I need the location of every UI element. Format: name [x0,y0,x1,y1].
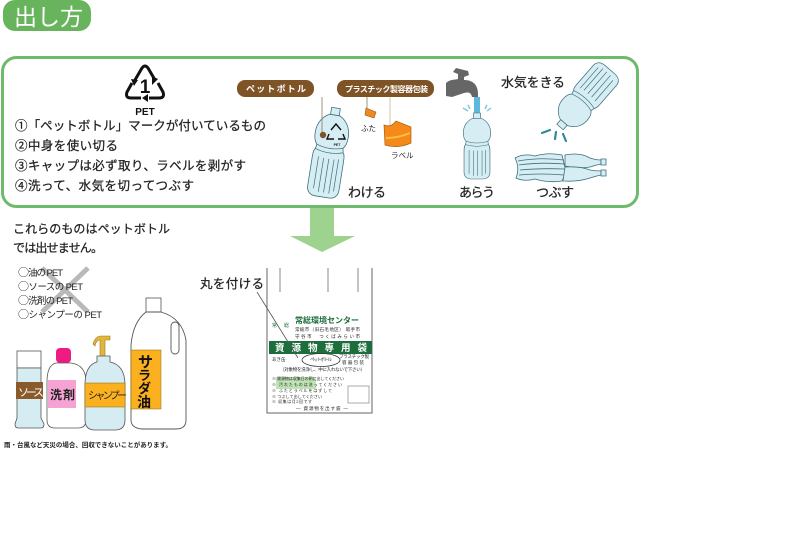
cross mark [42,268,88,312]
bag name box [348,386,369,403]
illustration: separating bottle, cap and label: PET [334,143,341,147]
icon: PET recycling mark: 1 [140,77,151,98]
callout: mark with a circle [200,277,298,358]
bag heading: 常総環境センター [295,315,359,325]
panel: how to put out PET bottles [2,58,638,206]
illustration: salad oil bottle: サ [138,354,153,371]
icon: PET recycling mark [126,66,164,118]
illustration: designated collection bag [267,268,372,413]
callout: mark with a circle: 丸を付ける [200,277,264,291]
bag notes: ※ ふたとラベルをはずして [272,387,332,393]
illustration: sauce bottle: ソース [18,387,44,399]
bag municipalities: 守谷市 つくばみらい市 [295,333,360,340]
text block: conditions [15,118,266,193]
label: wrapper: ラベル [391,151,414,160]
title badge [3,0,91,31]
text block: conditions: ①「ペットボトル」マークが付いているもの [15,118,266,133]
list: non-PET-recyclable items: ○洗剤の PET [18,292,73,308]
text block: conditions: ③キャップは必ず取り、ラベルを剥がす [15,158,246,173]
bag options with circled item: あき缶 [272,356,286,363]
bag municipalities [295,326,360,340]
bag options with circled item: ペットボトル [310,356,332,362]
illustration: sauce bottle [15,351,44,428]
list: non-PET-recyclable items: ○ソースの PET [18,278,83,294]
illustration: draining bottle [542,59,622,141]
text block: not accepted note [13,222,170,255]
bag municipalities: 常総市（旧石毛地区） 取手市 [295,326,360,333]
label pill: PET bottle: ペットボトル [246,83,306,94]
illustration: shampoo bottle: シャンプー [88,390,127,402]
illustration: detergent bottle [47,348,86,428]
bag options with circled item [272,353,370,373]
illustration: detergent bottle: 洗剤 [50,387,75,402]
illustration: salad oil bottle: ラ [138,368,151,383]
bag note highlight [276,377,316,389]
bag notes [272,375,344,404]
illustration: salad oil bottle: 油 [137,394,151,410]
icon: PET recycling mark: PET [135,107,155,118]
illustration: salad oil bottle [131,298,186,429]
text block: conditions: ②中身を使い切る [15,138,118,153]
illustration: separating bottle, cap and label [305,97,411,200]
label pill: plastic packaging: プラスチック製容器包装 [345,84,428,94]
illustration: salad oil bottle: ダ [138,381,151,396]
bag options with circled item: （対象物を洗浄し、中に入れないで下さい） [280,366,365,373]
title badge: 出し方 [14,4,83,30]
label: cap: ふた [361,124,376,133]
bag options with circled item: プラスチック製 [339,353,370,360]
bag municipality mark: 常 総 [272,322,289,329]
illustration: shampoo bottle [85,336,127,430]
illustration: crushed bottles [515,154,606,182]
bag notes: ※ 汚れたものは洗ってください [272,381,342,387]
text block: not accepted note: これらのものはペットボトル [13,222,170,236]
label pill: plastic packaging [337,80,434,97]
label: drain water: 水気をきる [501,75,565,90]
label pill: PET bottle [237,80,314,97]
label: crush: つぶす [536,185,574,200]
bag title band: 資源物専用袋 [275,342,367,354]
text block: conditions: ④洗って、水気を切ってつぶす [15,178,194,193]
arrow: down to bag [290,208,355,252]
label: separate: わける [348,185,386,200]
list: non-PET-recyclable items: ○油の PET [18,264,63,280]
list: non-PET-recyclable items: ○シャンプーの PET [18,306,102,322]
bag notes: ※ 収集は月2回です [272,398,312,404]
bag notes: ※ つぶして出してください [272,393,322,399]
bag options with circled item: 容器包装 [342,359,364,366]
list: non-PET-recyclable items [18,264,102,322]
bag notes: ※ 資源物は収集日の朝に出してください [272,375,344,381]
bag footer: — 資源物を出す袋 — [296,405,348,412]
footnote: 雨・台風など天災の場合、回収できないことがあります。 [4,440,172,449]
label: rinse: あらう [459,185,495,200]
text block: not accepted note: では出せません。 [13,241,103,255]
illustration: faucet and rinsing [446,68,491,179]
